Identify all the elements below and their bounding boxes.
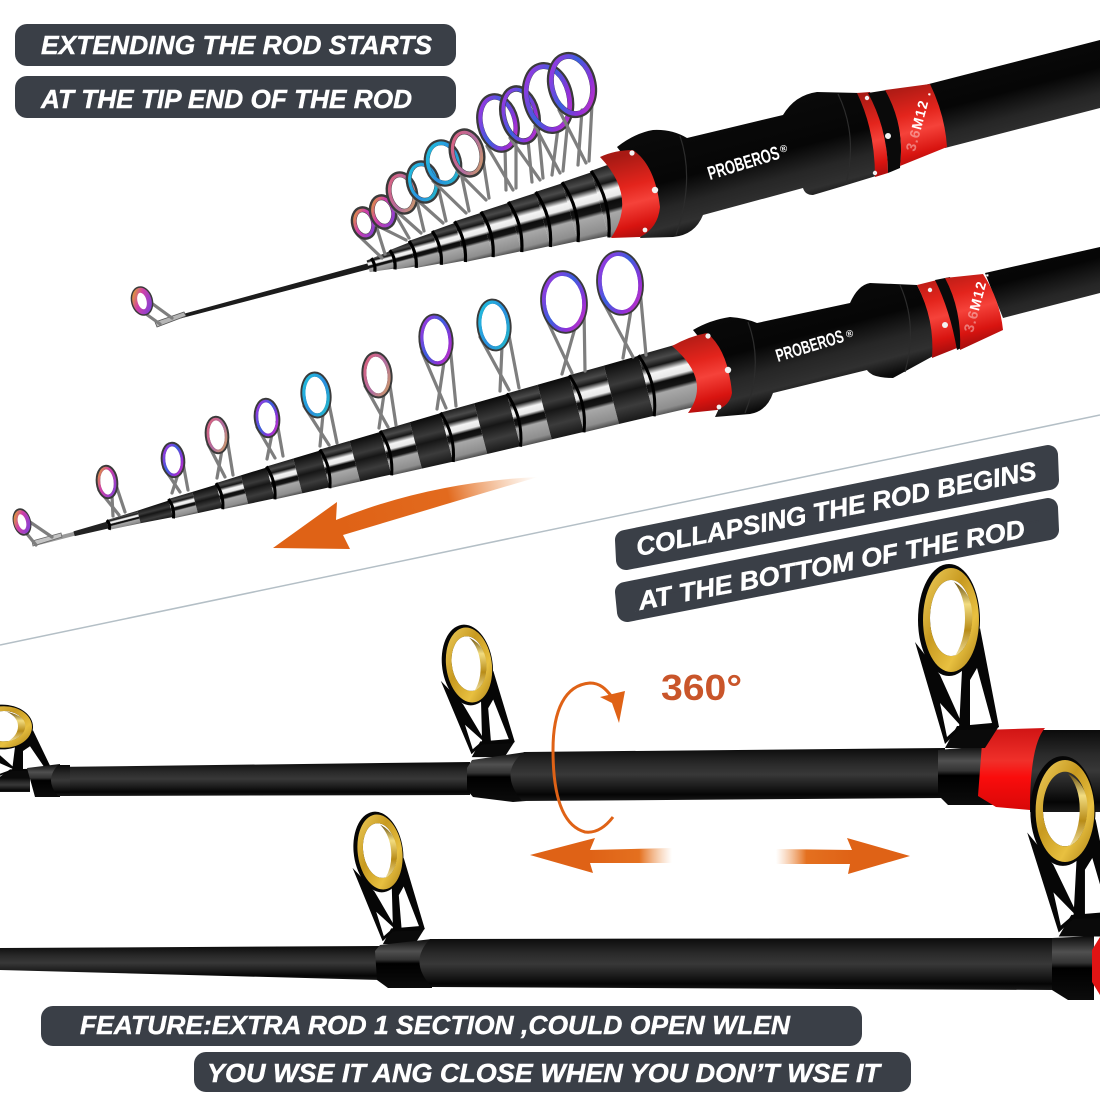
callout: extending, line 2 xyxy=(15,76,456,118)
arrow: collapse direction xyxy=(273,477,538,549)
size label: 3.6M12 . xyxy=(902,88,934,153)
arrow: right slide xyxy=(776,838,910,874)
arrow: left slide xyxy=(530,838,672,873)
thin rod section xyxy=(0,946,380,980)
360 degrees label: 360° xyxy=(661,667,742,708)
thick rod sections xyxy=(51,748,945,801)
right ferrule, red band and gold guide xyxy=(1027,756,1100,1000)
panel: lower close-up, upper rod xyxy=(0,564,1100,812)
rod B guides xyxy=(96,251,646,516)
brand label xyxy=(773,326,856,366)
rod A handle xyxy=(600,40,1100,238)
curved arrow xyxy=(553,683,625,832)
far-left gold guide and ferrule xyxy=(0,705,60,797)
thin rod sections xyxy=(0,762,470,796)
callout: collapsing, line 1: COLLAPSING THE ROD BEGINS xyxy=(633,455,1039,562)
left gold guide and ferrule xyxy=(348,812,432,988)
rod B tip guide xyxy=(11,507,62,546)
panel: extending rod (upper telescopic rod) xyxy=(129,40,1100,352)
brand label: PROBEROS xyxy=(773,326,846,366)
centre gold guide and ferrule xyxy=(436,625,526,802)
brand label: PROBEROS xyxy=(705,143,782,185)
right ferrule, gold guide and red band xyxy=(915,564,1100,812)
callout: feature, line 2: YOU WSE IT ANG CLOSE WHEN YOU DON’T WSE IT xyxy=(207,1058,882,1088)
screws xyxy=(629,96,891,232)
callout: extending, line 1 xyxy=(15,24,456,66)
red reel seat rings xyxy=(672,274,1003,413)
size label: 3.6M12 . xyxy=(960,269,992,334)
screws xyxy=(705,288,948,409)
brand label xyxy=(705,143,790,185)
callout: feature, line 2 xyxy=(194,1052,911,1092)
callout: extending, line 1: EXTENDING THE ROD STARTS xyxy=(41,30,433,60)
rod A tip guide xyxy=(129,285,186,327)
rotation indicator xyxy=(553,667,742,832)
brand label: ® xyxy=(845,328,856,341)
panel: collapsing rod (lower telescopic rod) xyxy=(11,247,1100,576)
rod A guides xyxy=(351,51,600,258)
thick rod section xyxy=(419,938,1055,990)
callout: collapsing, line 2: AT THE BOTTOM OF THE ROD xyxy=(635,513,1028,616)
callout: extending, line 2: AT THE TIP END OF THE ROD xyxy=(40,84,412,114)
rod B handle xyxy=(672,247,1100,417)
red reel seat rings xyxy=(600,84,947,238)
brand label: ® xyxy=(779,143,790,156)
callout: feature, line 1 xyxy=(41,1006,862,1046)
callout: feature, line 1: FEATURE:EXTRA ROD 1 SECTION ,COULD OPEN WLEN xyxy=(80,1010,791,1040)
rod A telescoping sections xyxy=(170,163,632,352)
panel: lower close-up, lower rod xyxy=(0,756,1100,1000)
rod B telescoping sections xyxy=(27,339,712,576)
